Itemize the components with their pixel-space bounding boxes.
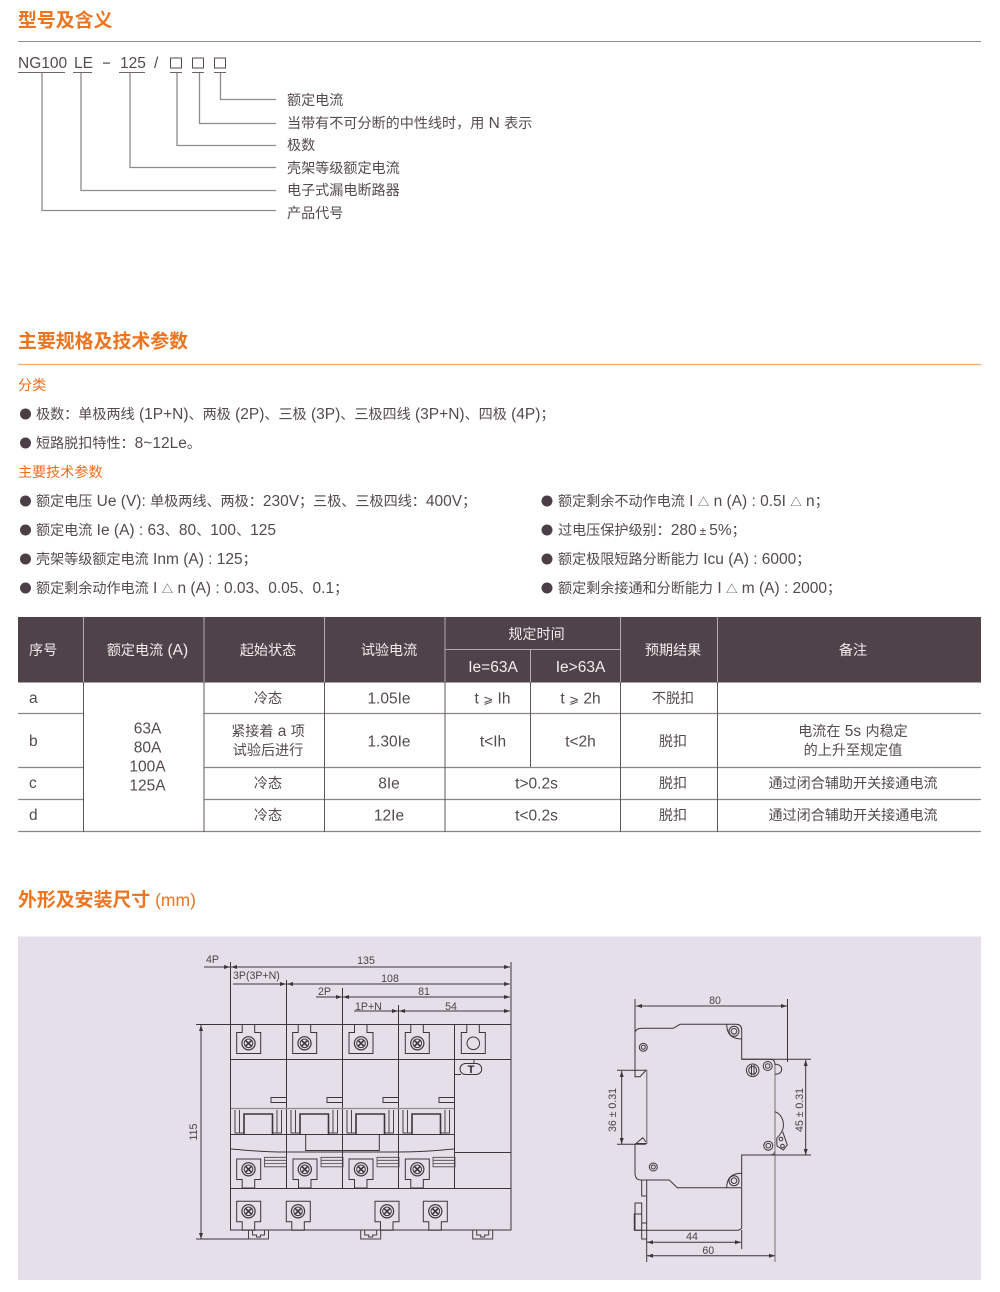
table body: 紧接着 a 项 [231,723,305,740]
top terminals [237,1024,485,1054]
model code string: NG100 [18,55,67,72]
table header: 额定电流 (A) [107,642,188,659]
lower terminals [237,1157,455,1188]
panel: technical parameters: 额定剩余不动作电流 I △ n (A) : 0.5I △ n； [558,493,829,510]
table body: 不脱扣 [652,690,694,706]
model code string: 125 [120,55,146,72]
heading: main specs: 主要规格及技术参数 [18,330,188,352]
dimension 36 [607,1070,646,1144]
test button: T [468,1064,475,1076]
table body: 试验后进行 [233,742,303,758]
table body: 63A [134,720,162,738]
table header: 预期结果 [645,642,701,658]
table body: 通过闭合辅助开关接通电流 [768,775,938,791]
table body: b [29,733,38,750]
table body: 冷态 [254,690,282,706]
table body: 脱扣 [659,807,687,823]
heading: model and meaning: 型号及含义 [18,8,113,32]
table body: 80A [134,740,162,756]
breaker body [230,1024,511,1230]
table body: 的上升至规定值 [804,742,902,758]
test table [18,617,981,832]
table body: 100A [129,758,166,776]
leader labels [287,92,532,221]
table grid [18,714,981,832]
width dimensions: 3P(3P+N) [233,970,280,982]
toggles and latches [235,1098,454,1134]
table body [29,690,938,824]
table header: 起始状态 [240,642,296,658]
leader labels: 电子式漏电断路器 [287,182,400,198]
table body: t ⩾ Ih [475,690,510,708]
table header: 序号 [29,642,57,658]
leader labels: 极数 [287,137,315,153]
table body: 1.05Ie [367,690,411,708]
table body: d [29,807,38,824]
table header: 规定时间 [508,626,565,642]
dimension 45: 45 ± 0.31 [794,1088,806,1132]
dimension 80 [636,995,787,1008]
table body: t ⩾ 2h [560,690,601,708]
table body: 脱扣 [659,775,687,791]
leader labels: 当带有不可分断的中性线时，用 N 表示 [287,115,532,132]
table body: 12Ie [374,808,404,824]
table body: c [29,775,37,792]
table body: t<Ih [480,734,506,750]
side screws [639,1026,784,1186]
table header: Ie=63A [468,659,518,676]
table header: 备注 [839,642,867,658]
panel: technical parameters: 额定电压 Ue (V): 单极两线、两极：230V；三极、三极四线：400V； [36,493,476,510]
width dimensions: 81 [418,986,430,998]
dimension 60 [647,1245,775,1258]
width dimensions [204,954,511,1024]
table body: a [29,690,38,707]
dimension 36: 36 ± 0.31 [607,1088,619,1132]
table body: 1.30Ie [367,734,411,750]
leader labels: 产品代号 [287,205,343,221]
panel: classification [18,377,555,452]
side view drawing [607,995,811,1262]
width dimensions: 108 [381,973,399,985]
panel: technical parameters: 过电压保护级别：280±5%； [558,522,746,539]
panel: classification: 极数：单极两线 (1P+N)、两极 (2P)、三极 (3P)、三极四线 (3P+N)、四极 (4P)； [36,406,555,423]
side outline [634,999,788,1262]
dimension 60: 60 [702,1245,714,1257]
table body: 冷态 [254,807,282,823]
din clips [248,1230,493,1239]
model code string: / [154,55,159,72]
panel: technical parameters: 额定极限短路分断能力 Icu (A) : 6000； [558,551,810,568]
height dimension [188,1024,268,1239]
width dimensions: 4P [206,954,219,966]
table header [18,617,981,682]
panel: classification: 分类 [18,377,46,393]
heading: dimensions: 外形及安装尺寸 (mm) [18,889,196,911]
dimension 44: 44 [686,1231,698,1243]
panel: technical parameters: 主要技术参数 [18,464,103,480]
panel: technical parameters: 额定电流 Ie (A) : 63、80、100、125 [36,522,276,539]
table body: 冷态 [254,775,282,791]
leader labels: 额定电流 [287,92,343,108]
leader labels: 壳架等级额定电流 [287,160,400,176]
width dimensions: 54 [445,1001,457,1013]
dimension 45 [770,1059,811,1155]
test button [455,1060,482,1076]
table body: t<2h [565,734,596,750]
table body: 电流在 5s 内稳定 [798,723,908,740]
table body: 通过闭合辅助开关接通电流 [768,807,938,823]
model code diagram [18,55,532,221]
table header: 试验电流 [361,642,417,658]
panel: technical parameters [18,464,841,597]
height dimension: 115 [188,1123,200,1140]
panel: classification: 短路脱扣特性：8~12Le。 [36,435,201,452]
model code string: LE [74,55,93,72]
panel: dimensions background [18,936,981,1280]
leader lines [42,73,276,210]
table body: t>0.2s [515,776,558,792]
panel: technical parameters: 额定剩余接通和分断能力 I △ m (A) : 2000； [558,580,841,597]
table body: 125A [129,778,166,794]
model code string [18,55,226,72]
table header: Ie>63A [556,659,606,676]
dimension 80: 80 [709,995,721,1007]
bottom terminals [237,1201,447,1230]
width dimensions: 2P [318,986,331,998]
front view drawing [188,954,511,1239]
width dimensions: 135 [357,955,375,967]
width dimensions: 1P+N [355,1001,382,1013]
panel: technical parameters: 额定剩余动作电流 I △ n (A) : 0.03、0.05、0.1； [36,580,348,597]
table body: 8Ie [378,776,400,792]
table body: 脱扣 [659,733,687,749]
table body: t<0.2s [515,808,558,824]
dimension 44 [647,1230,742,1249]
panel: technical parameters: 壳架等级额定电流 Inm (A) : 125； [36,551,257,568]
